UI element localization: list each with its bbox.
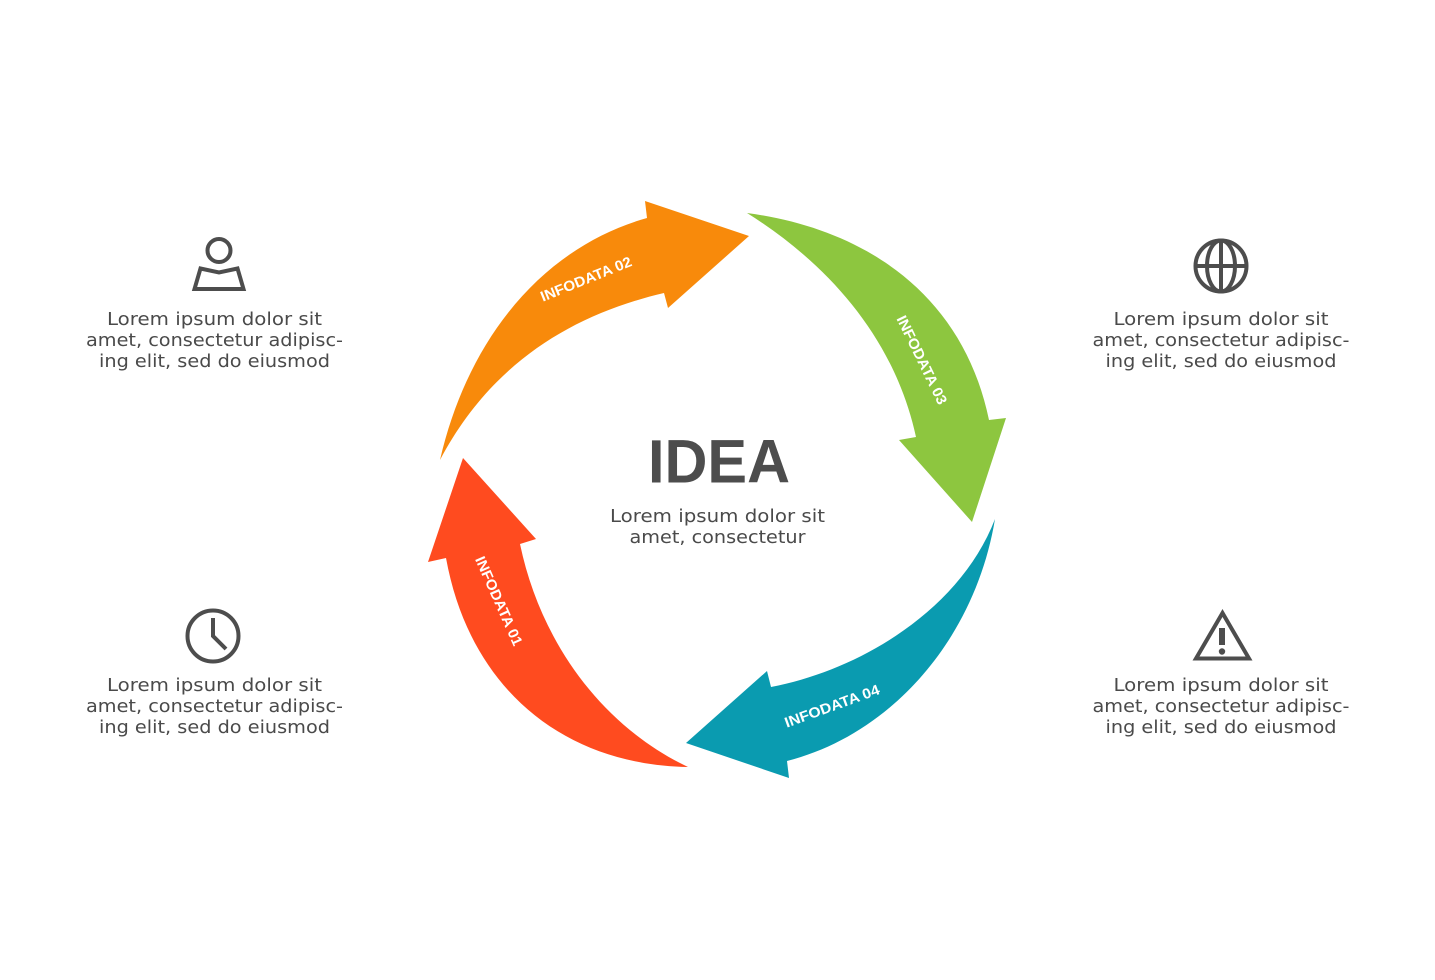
center text block bbox=[610, 507, 825, 548]
text block: bottom right: amet, consectetur adipisc- bbox=[1092, 697, 1350, 717]
icon: warning triangle bbox=[1196, 613, 1249, 658]
text block: bottom left: Lorem ipsum dolor sit bbox=[107, 676, 322, 696]
center text block: Lorem ipsum dolor sit bbox=[610, 507, 825, 527]
center text block: amet, consectetur bbox=[630, 528, 806, 548]
arrow: infodata 03 green bbox=[747, 213, 1006, 522]
arrow: infodata 03 green: INFODATA 03 bbox=[893, 313, 950, 408]
text block: bottom right bbox=[1092, 676, 1350, 738]
icon: clock bbox=[188, 610, 238, 662]
arrow: infodata 01 red: INFODATA 01 bbox=[471, 554, 525, 649]
text block: top left bbox=[86, 310, 343, 372]
text block: top left: amet, consectetur adipisc- bbox=[86, 331, 343, 351]
text block: top right: ing elit, sed do eiusmod bbox=[1106, 352, 1336, 372]
text block: top right: amet, consectetur adipisc- bbox=[1092, 331, 1350, 351]
text block: bottom left bbox=[86, 676, 343, 738]
arrow: infodata 02 orange: INFODATA 02 bbox=[538, 254, 634, 306]
text block: top left: ing elit, sed do eiusmod bbox=[99, 352, 330, 372]
arrow: infodata 02 orange bbox=[440, 201, 749, 460]
text block: top right bbox=[1092, 310, 1350, 372]
arrow: infodata 01 red bbox=[428, 458, 688, 767]
text block: bottom right: Lorem ipsum dolor sit bbox=[1114, 676, 1329, 696]
text block: bottom left: ing elit, sed do eiusmod bbox=[99, 718, 330, 738]
text block: top right: Lorem ipsum dolor sit bbox=[1114, 310, 1329, 330]
text block: bottom left: amet, consectetur adipisc- bbox=[86, 697, 343, 717]
arrow: infodata 04 teal: INFODATA 04 bbox=[783, 682, 882, 732]
text block: bottom right: ing elit, sed do eiusmod bbox=[1106, 718, 1336, 738]
icon: person on map bbox=[194, 239, 244, 289]
text block: top left: Lorem ipsum dolor sit bbox=[107, 310, 322, 330]
icon: globe bbox=[1196, 240, 1246, 292]
arrow: infodata 04 teal bbox=[686, 519, 995, 778]
title: IDEA: IDEA bbox=[648, 428, 790, 496]
